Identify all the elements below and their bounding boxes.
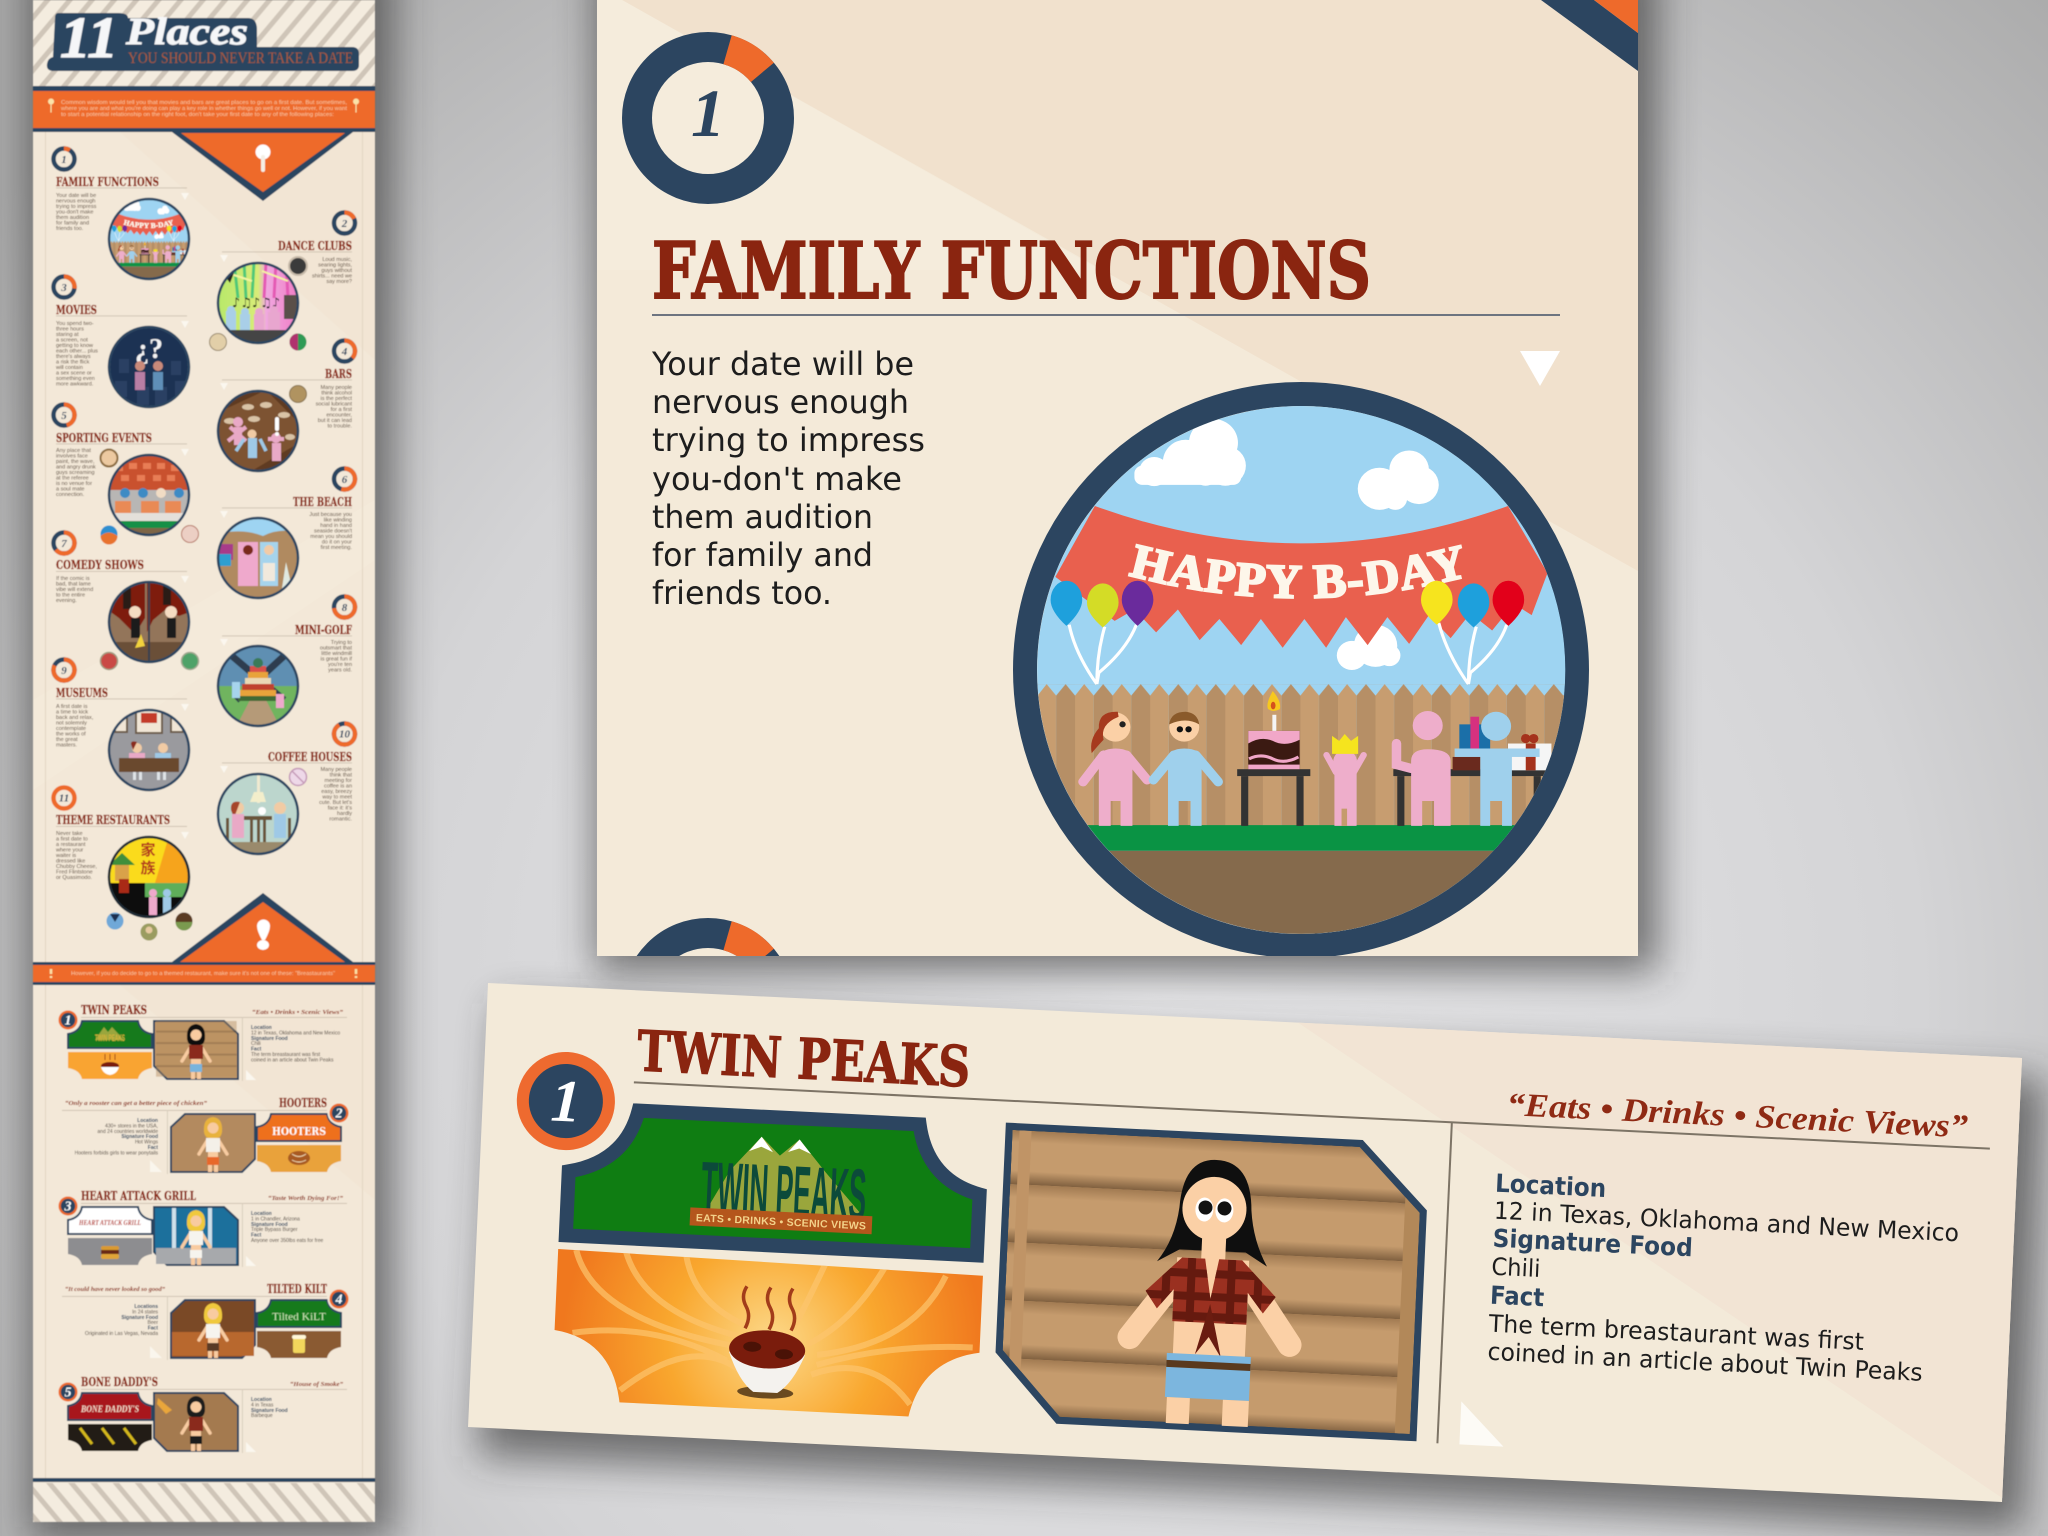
item 6: the beach: 6 (342, 474, 348, 486)
child with crown (1327, 734, 1364, 826)
item 11: theme restaurants: Never take (56, 831, 83, 837)
item 3: movies: three hours (56, 326, 84, 332)
second table, guests and gifts (1393, 711, 1551, 826)
restaurant 5: bone daddy's (56, 1375, 347, 1453)
logo panel: TWIN PEAKS (699, 1146, 868, 1237)
item 4: bars: but it can lead (318, 418, 352, 424)
item 5: sporting events: and angry drunk (56, 464, 96, 470)
restaurant 2: hooters: Hot Wings (135, 1140, 158, 1146)
item 2: dance clubs: guys without (321, 268, 352, 274)
item 5: sporting events: a soul mate (56, 486, 84, 492)
item 2: dance clubs: DANCE CLUBS (278, 239, 352, 253)
item 8: mini-golf: is great fun if (320, 656, 352, 662)
item 1: family functions (54, 148, 189, 281)
item 10: coffee houses: 10 (339, 728, 350, 740)
white triangle marker (1520, 351, 1560, 386)
item 4: bars: social lubricant (316, 402, 352, 408)
restaurant 3: heart attack grill: HEART ATTACK GRILL (81, 1189, 196, 1203)
item 7: comedy shows: bad, that lame (56, 582, 91, 588)
restaurant 4: tilted kilt: “It could have never looked so good” (65, 1286, 166, 1293)
item 3: movies: will contain (55, 365, 83, 371)
heading: family functions: FAMILY FUNCTIONS (652, 226, 1371, 317)
item 3: movies: staring at (56, 332, 79, 338)
restaurant 2: hooters: HOOTERS (279, 1096, 327, 1110)
restaurant 4: tilted kilt: Beer (147, 1320, 158, 1326)
item 3: movies: 3 (60, 282, 67, 294)
item 10: coffee houses: coffee is an (324, 784, 352, 790)
restaurant 3: heart attack grill: HEART ATTACK GRILL (78, 1219, 141, 1227)
panel: family functions enlarged (597, 0, 1638, 956)
item 8: mini-golf: MINI-GOLF (295, 623, 352, 637)
item 11: theme restaurants: a first date to (56, 836, 88, 842)
item 6: the beach: hand in hand (320, 523, 352, 529)
logo panel (566, 1107, 983, 1255)
item 11: theme restaurants: a restaurant (56, 842, 86, 848)
item 10: coffee houses: hardly (337, 811, 352, 817)
item 7: comedy shows: If the comic is (56, 576, 90, 582)
title: 11 Places logo: Places (125, 11, 248, 53)
item 9: museums: the great (56, 737, 78, 743)
item 7: comedy shows: 7 (61, 538, 67, 550)
body text: for family and (652, 536, 873, 574)
restaurant 4: tilted kilt: 4 (334, 1292, 342, 1308)
restaurant 5: bone daddy's: Barbeque (251, 1413, 273, 1419)
item 3: movies (54, 276, 190, 408)
item 11: theme restaurants: Chubby Cheese, (56, 864, 97, 870)
number badge 1: 1 (691, 75, 725, 151)
item 9: museums: contemplate (56, 726, 86, 732)
couple (1083, 712, 1218, 826)
restaurant 5: bone daddy's: 5 (64, 1386, 72, 1400)
girl figure (1126, 1156, 1298, 1429)
item 10: coffee houses: way to meet (321, 794, 352, 800)
logo panel: EATS • DRINKS • SCENIC VIEWS (696, 1212, 866, 1232)
restaurant 2: hooters: HOOTERS (272, 1125, 326, 1138)
item 9: museums: back and relax, (56, 715, 94, 721)
restaurant 3: heart attack grill: 1 in Chandler, Arizona (251, 1216, 300, 1222)
item 1: family functions: nervous enough (56, 198, 95, 204)
restaurant 4: tilted kilt: In 24 states (132, 1309, 158, 1315)
item 2: dance clubs: Loud music, (322, 257, 352, 263)
item 8: mini-golf (217, 596, 355, 727)
item 6: the beach: do it on your (322, 540, 352, 546)
item 9: museums: a time to kick (56, 710, 88, 716)
item 3: movies: more awkward. (56, 382, 94, 388)
title: 11 Places logo: YOU SHOULD NEVER TAKE A DATE (128, 50, 353, 67)
item 11: theme restaurants: Fred Flintstone (56, 870, 93, 876)
number badge (505, 1040, 626, 1162)
restaurant 2: hooters: 430+ stores in the USA, (105, 1123, 158, 1129)
item 9: museums: MUSEUMS (56, 686, 108, 700)
restaurant 5: bone daddy's: BONE DADDY'S (80, 1404, 139, 1414)
restaurant 2: hooters: Fact (148, 1145, 158, 1151)
restaurant 4: tilted kilt: Originated in Las Vegas, Nevada (85, 1331, 158, 1337)
item 5: sporting events: connection. (56, 492, 85, 498)
item 6: the beach: first meeting. (321, 545, 352, 551)
item 5: sporting events: SPORTING EVENTS (56, 431, 152, 445)
restaurant 1: twin peaks: “Eats • Drinks • Scenic Views” (252, 1009, 344, 1016)
item 1: family functions: FAMILY FUNCTIONS (56, 175, 159, 189)
white corner triangle (1459, 1401, 1505, 1447)
item 10: coffee houses: COFFEE HOUSES (268, 750, 352, 764)
restaurant 2: hooters: “Only a rooster can get a better piece of chicken” (65, 1100, 208, 1107)
restaurant 2: hooters: Signature Food (121, 1134, 158, 1140)
restaurant 1: twin peaks: Fact (251, 1047, 262, 1053)
item 4: bars: 4 (341, 346, 348, 358)
number badge 1 (637, 35, 779, 189)
item 3: movies: a sex scene or (56, 370, 92, 376)
item 8: mini-golf: Trying to (331, 640, 352, 646)
item 10: coffee houses: easy, breezy (321, 789, 352, 795)
item 11: theme restaurants: where your (55, 848, 83, 854)
balloons (1051, 581, 1524, 684)
body text: friends too. (652, 574, 832, 612)
item 3: movies: there's always (56, 354, 91, 360)
warning banner (33, 962, 375, 985)
item 3: movies: ¿? (135, 334, 163, 365)
restaurant 1: twin peaks: The term breastaurant was first (251, 1052, 321, 1058)
item 11: theme restaurants: waiter is (55, 853, 76, 859)
item 4: bars: encounter, (326, 412, 352, 418)
restaurant 3: heart attack grill: “Taste Worth Dying For!” (268, 1195, 344, 1202)
item 7: comedy shows: COMEDY SHOWS (56, 558, 144, 572)
cake on table (1237, 691, 1310, 826)
item 7: comedy shows (54, 532, 198, 670)
panel: full infographic thumbnail strip (33, 0, 375, 1522)
food panel (551, 1249, 983, 1420)
restaurant 4: tilted kilt: Tilted KiLT (272, 1311, 326, 1323)
restaurant facts: Chili (1491, 1253, 1541, 1283)
restaurant 2: hooters: Location (137, 1118, 158, 1124)
item 9: museums (54, 660, 190, 791)
banner with zigzag edge (1055, 506, 1547, 648)
restaurant facts: Fact (1490, 1281, 1545, 1312)
banner text (1128, 574, 1476, 598)
item 1: family functions: trying to impress (56, 204, 97, 210)
restaurant 1: twin peaks: TWIN PEAKS (81, 1003, 147, 1017)
restaurant 2: hooters (62, 1096, 350, 1174)
item 6: the beach: like winding (324, 518, 352, 524)
item 8: mini-golf: outsmart that (320, 646, 352, 652)
restaurant 2: hooters: Hooters forbids girls to wear ponytails (75, 1150, 158, 1156)
item 9: museums: 9 (61, 665, 67, 677)
restaurant 4: tilted kilt: Fact (148, 1326, 158, 1332)
title: 11 Places logo: 11 (60, 5, 118, 70)
item 2: dance clubs: shirts... need we (312, 274, 352, 280)
item 8: mini-golf: little windmill (321, 651, 352, 657)
restaurant 1: twin peaks: coined in an article about Twin Peaks (251, 1057, 334, 1063)
restaurant 1: twin peaks: 12 in Texas, Oklahoma and New Mexico (251, 1030, 340, 1036)
item 5: sporting events: guys screaming (56, 470, 95, 476)
item 11: theme restaurants: 家 (140, 841, 156, 859)
restaurant 2: hooters: 2 (334, 1106, 342, 1122)
item 10: coffee houses: meeting for (324, 778, 352, 784)
item 10: coffee houses: Many people (320, 767, 352, 773)
title: 11 Places logo (47, 5, 359, 71)
item 10: coffee houses: cute. But let's (319, 800, 352, 806)
intro banner: to start a potential relationship on the right foot, don't take your first date to any of the following places: (61, 112, 334, 118)
illustration: birthday party circle: HAPPY B-DAY (1128, 544, 1462, 599)
item 11: theme restaurants (54, 788, 192, 940)
item 6: the beach: Just because you (309, 512, 352, 518)
item 6: the beach: seaside doesn't (314, 528, 352, 534)
restaurant 1: twin peaks: 1 (64, 1014, 72, 1028)
restaurant 1: twin peaks: Chili (251, 1041, 261, 1047)
item 9: museums: masters. (56, 742, 78, 748)
item 6: the beach: THE BEACH (293, 495, 352, 509)
restaurant 1: twin peaks: Signature Food (251, 1036, 288, 1042)
item 11: theme restaurants: or Quasimodo. (56, 875, 93, 881)
restaurant facts: coined in an article about Twin Peaks (1487, 1338, 1923, 1387)
item 9: museums: the works of (56, 732, 86, 738)
item 5: sporting events: involves face (56, 454, 88, 460)
restaurant facts: Location (1495, 1169, 1607, 1203)
item 4: bars: is the perfect (320, 396, 352, 402)
item 6: the beach: mean you should (310, 534, 352, 540)
item 7: comedy shows: evening. (56, 598, 77, 604)
restaurant 3: heart attack grill: Signature Food (251, 1222, 288, 1228)
item 1: family functions: them audition (56, 215, 89, 221)
orange up triangle with exclamation icon (172, 893, 353, 962)
item 3: movies: each other... plus (56, 348, 98, 354)
illustration: birthday party circle (1013, 382, 1589, 956)
restaurant 3: heart attack grill (56, 1189, 347, 1267)
item 11: theme restaurants: 11 (59, 792, 69, 804)
item 3: movies: something even (56, 376, 95, 382)
restaurant 1: twin peaks: Location (251, 1025, 272, 1031)
restaurant 5: bone daddy's: “House of Smoke” (290, 1381, 344, 1388)
item 1: family functions: 1 (61, 154, 67, 166)
body text: you-don't make (652, 460, 902, 498)
item 4: bars: for a first (331, 407, 352, 413)
item 3: movies: getting to know (56, 343, 93, 349)
body text: them audition (652, 498, 873, 536)
restaurant facts: Signature Food (1492, 1224, 1693, 1262)
orange down triangle with pin icon (172, 132, 353, 201)
item 7: comedy shows: vibe will extend (56, 587, 93, 593)
item 1: family functions: friends too. (56, 226, 84, 232)
item 5: sporting events: at the referee (56, 476, 89, 482)
item 4: bars: to trouble. (328, 424, 352, 430)
item 9: museums: A first date is (56, 704, 88, 710)
warning banner: However, if you do decide to go to a themed restaurant, make sure it's not one of these: "Breastaurants" (71, 971, 335, 977)
item 4: bars: think alcohol (321, 390, 352, 396)
item 8: mini-golf: years old. (328, 668, 352, 674)
restaurant 1: twin peaks (56, 1003, 347, 1081)
item 11: theme restaurants: dressed like (56, 858, 85, 864)
item 2: dance clubs: 2 (341, 218, 348, 230)
restaurant 4: tilted kilt: Signature Food (121, 1315, 158, 1321)
item 3: movies: a risk the flick (56, 360, 90, 366)
item 10: coffee houses: romantic. (329, 816, 352, 822)
item 3: movies: You spend two- (56, 321, 94, 327)
item 5: sporting events (54, 404, 198, 544)
body text: trying to impress (652, 421, 925, 459)
restaurant 2: hooters: and 24 countries worldwide (97, 1129, 158, 1135)
item 4: bars: Many people (320, 385, 352, 391)
intro banner: Common wisdom would tell you that movies and bars are great places to go on a first date. But sometimes, (61, 100, 347, 106)
item 5: sporting events: 5 (61, 410, 67, 422)
body text: nervous enough (652, 383, 909, 421)
clouds (1134, 419, 1439, 670)
next badge peek (636, 918, 780, 956)
item 10: coffee houses: think that (330, 772, 352, 778)
item 8: mini-golf: 8 (342, 602, 348, 614)
panel: twin peaks enlarged card (468, 983, 2022, 1502)
restaurant 4: tilted kilt: TILTED KILT (267, 1282, 327, 1296)
intro banner (33, 86, 375, 132)
restaurant 1: twin peaks: TWIN PEAKS (95, 1033, 125, 1043)
item 11: theme restaurants: THEME RESTAURANTS (56, 813, 170, 827)
item 8: mini-golf: you're ten (328, 662, 352, 668)
restaurant 3: heart attack grill: Anyone over 350lbs eats for free (251, 1238, 323, 1244)
item 10: coffee houses (217, 724, 355, 855)
restaurant 4: tilted kilt: Locations (134, 1304, 158, 1310)
character panel (1000, 1130, 1433, 1440)
restaurant 5: bone daddy's: 4 in Texas (251, 1402, 274, 1408)
corner ribbon (1541, 0, 1638, 71)
heading: twin peaks: TWIN PEAKS (636, 1018, 972, 1101)
restaurant 5: bone daddy's: BONE DADDY'S (81, 1375, 158, 1389)
item 1: family functions: you-don't make (56, 210, 93, 216)
grass and ground (1032, 825, 1573, 851)
item 5: sporting events: Any place that (56, 448, 91, 454)
item 2: dance clubs: say more? (326, 279, 352, 285)
item 2: dance clubs: searing lights, (318, 262, 352, 268)
item 3: movies: MOVIES (56, 303, 97, 317)
item 5: sporting events: is no venue for (56, 481, 92, 487)
item 6: the beach (217, 468, 355, 599)
item 2: dance clubs (210, 212, 355, 350)
restaurant 3: heart attack grill: Location (251, 1211, 272, 1217)
number badge: 1 (549, 1066, 582, 1135)
restaurant 5: bone daddy's: Location (251, 1397, 272, 1403)
item 3: movies: a screen, not (56, 338, 88, 344)
body text: Your date will be (651, 345, 914, 383)
item 5: sporting events: paint, the wave, (56, 459, 95, 465)
item 4: bars (217, 340, 355, 472)
item 1: family functions: Your date will be (56, 193, 96, 199)
tagline: “Eats • Drinks • Scenic Views” (1506, 1087, 1969, 1146)
restaurant 5: bone daddy's: Signature Food (251, 1408, 288, 1414)
intro banner: where you are and what you're doing can play a key role in whether things go well or not. However, if you want (60, 106, 347, 112)
item 7: comedy shows: to the entire (56, 592, 85, 598)
restaurant facts: 12 in Texas, Oklahoma and New Mexico (1493, 1197, 1960, 1247)
item 11: theme restaurants: 族 (140, 859, 156, 877)
item 4: bars: BARS (325, 367, 352, 381)
item 10: coffee houses: face it: it's (328, 806, 352, 812)
restaurant facts: The term breastaurant was first (1487, 1310, 1865, 1356)
item 1: family functions: for family and (56, 220, 89, 226)
fence (1038, 684, 1567, 826)
restaurant 3: heart attack grill: 3 (64, 1200, 72, 1214)
item 2: dance clubs: ♪♫♪♫♪ (232, 296, 280, 311)
restaurant 3: heart attack grill: Fact (251, 1233, 262, 1239)
restaurant 4: tilted kilt (62, 1282, 350, 1360)
item 9: museums: not solemnly (56, 720, 87, 726)
restaurant 3: heart attack grill: Triple Bypass Burger (251, 1227, 298, 1233)
